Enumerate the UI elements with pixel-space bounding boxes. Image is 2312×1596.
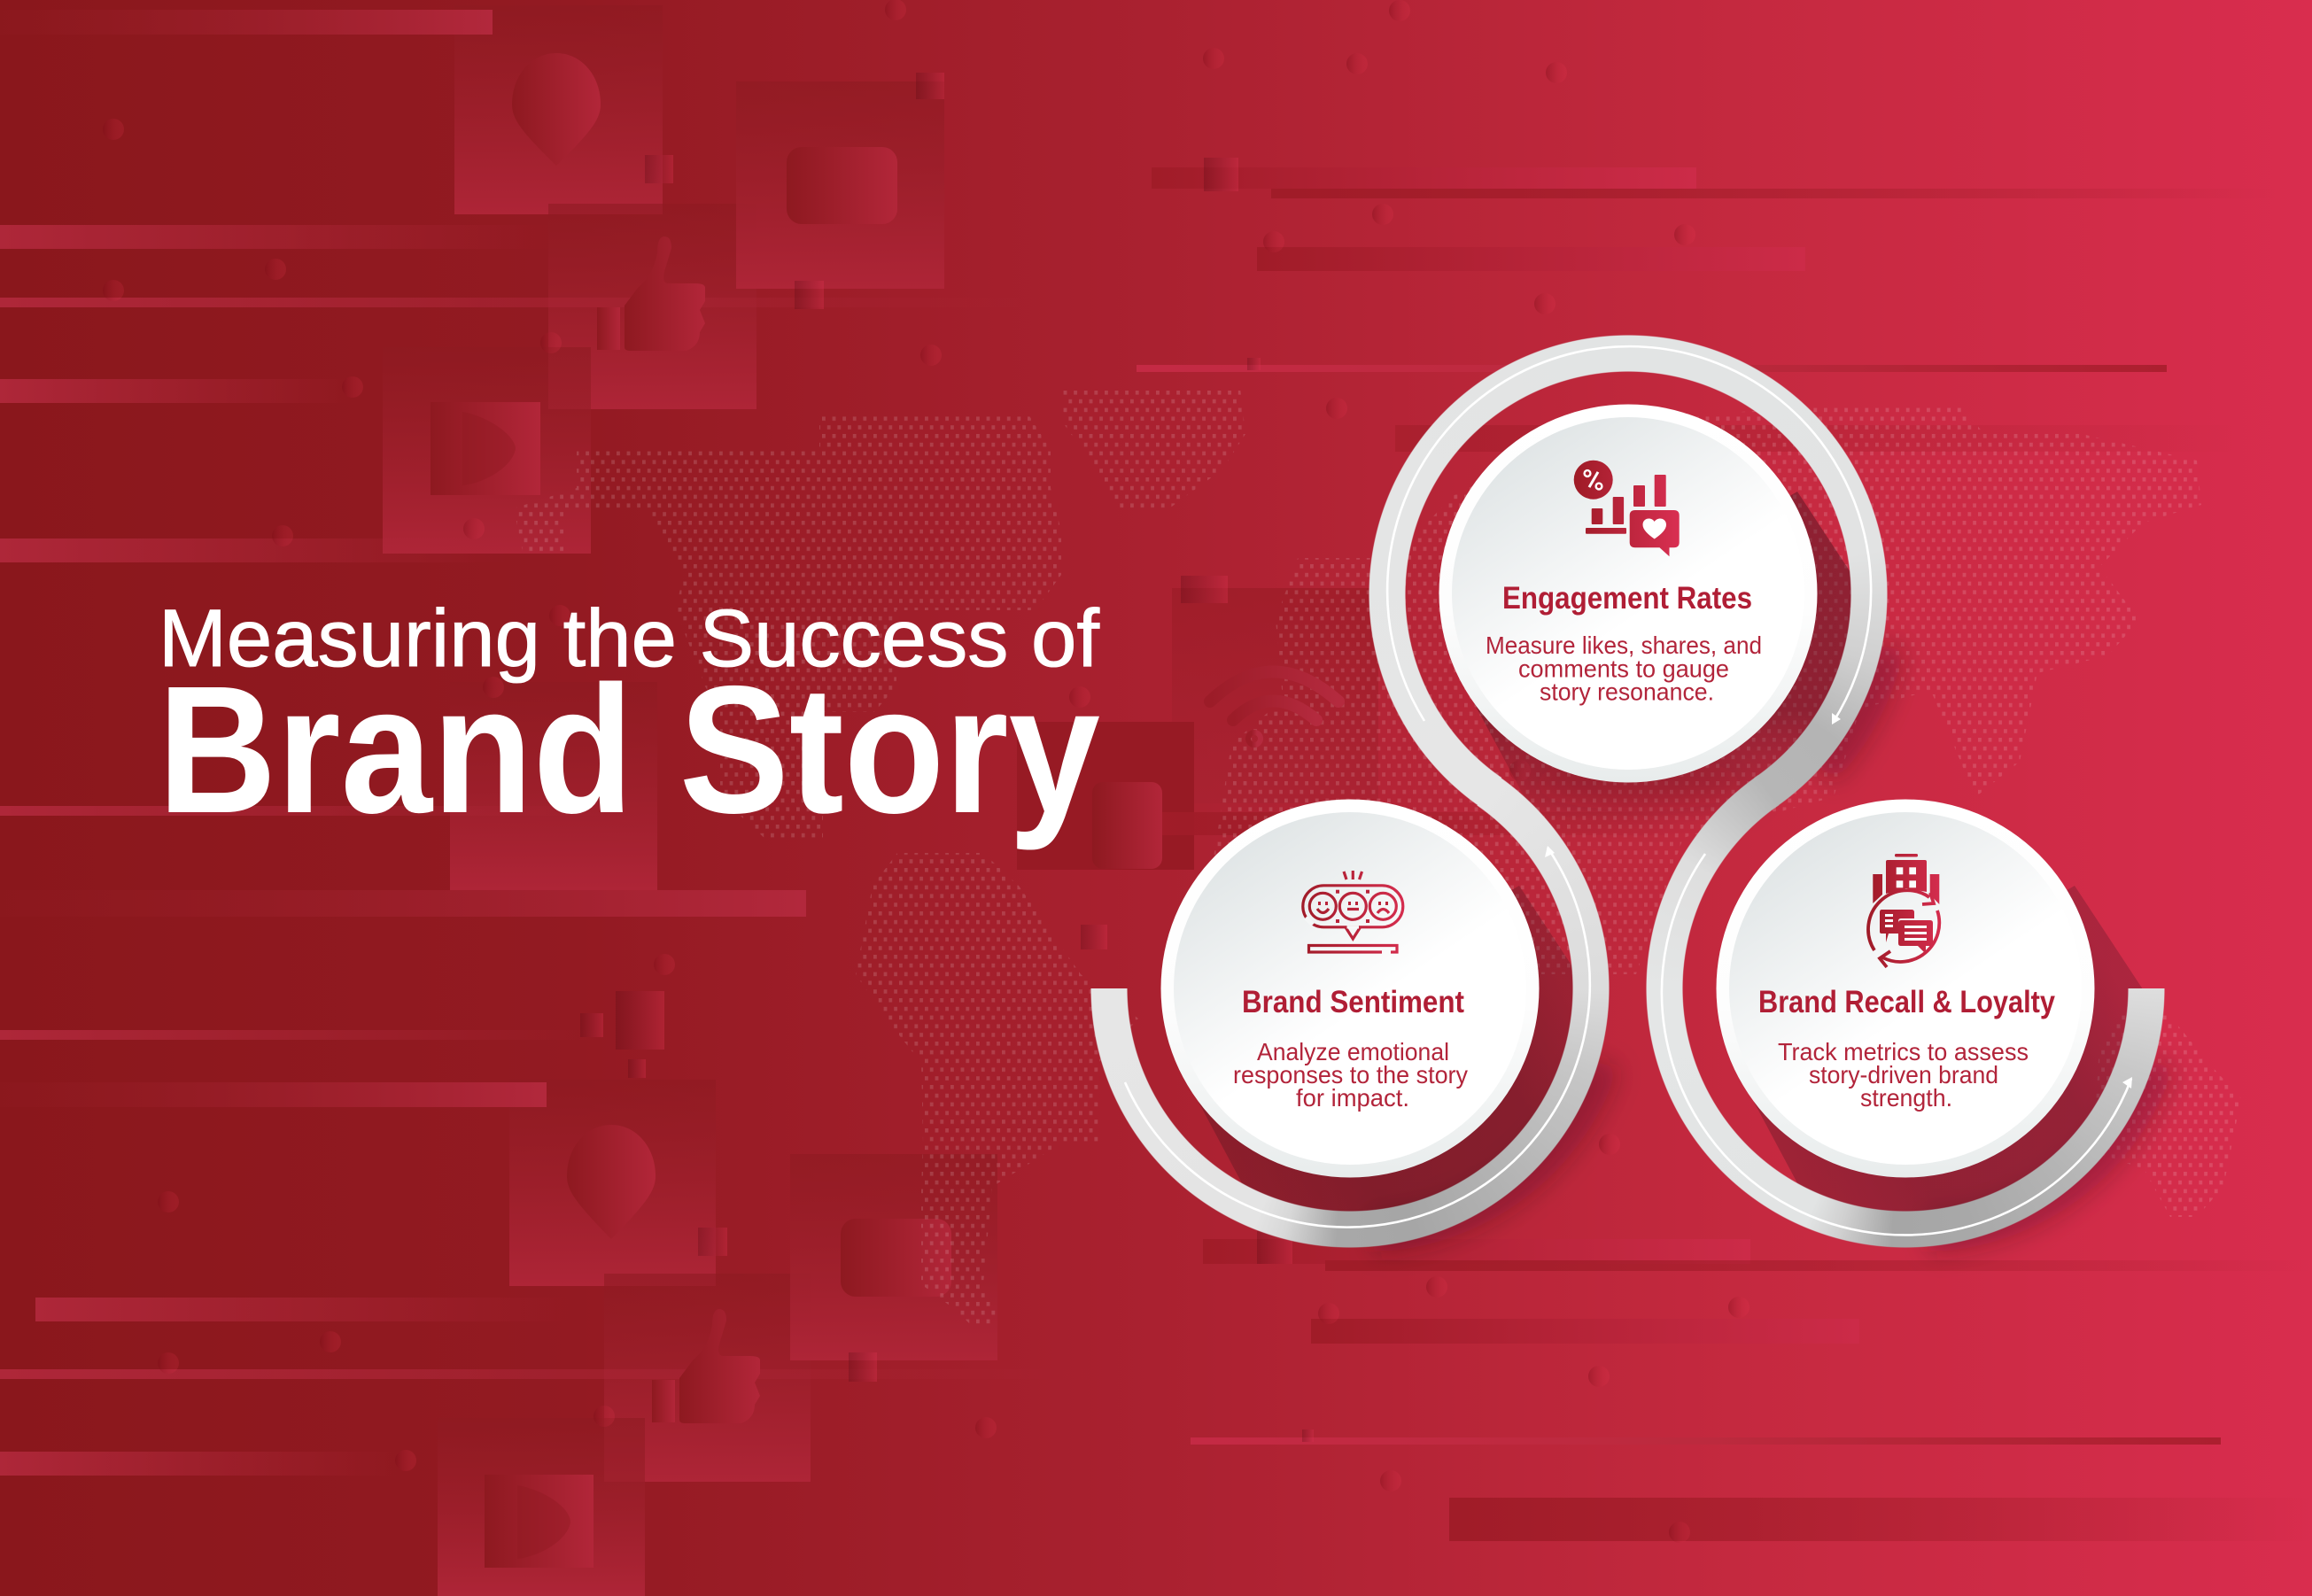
text: Brand Sentiment description: responses to the story	[1233, 1061, 1468, 1089]
arrow line: right circle	[1662, 854, 2132, 1235]
icon: building with circular arrows and chat bubbles	[1868, 854, 1939, 967]
decorative dots	[103, 0, 1750, 1543]
text: Brand Recall & Loyalty description: Track metrics to assess	[1778, 1038, 2029, 1065]
text: Engagement Rates description: story resonance.	[1540, 678, 1714, 705]
arrow line: left circle	[1125, 846, 1590, 1228]
panel: Brand Sentiment	[1160, 799, 1540, 1178]
heading: Brand Sentiment: Brand Sentiment	[1242, 985, 1464, 1019]
decorative icons: thumbs up	[597, 236, 760, 1423]
ribbon segment: left circle arc	[1090, 729, 1610, 1248]
text: Engagement Rates description: comments to gauge	[1518, 655, 1729, 682]
decorative small squares	[580, 73, 1314, 1442]
icon: engagement chart with percent and heart	[1574, 461, 1680, 556]
ribbon segment: top circle arc	[1369, 335, 1888, 854]
long shadows cast by the circles	[1186, 492, 2145, 1227]
S-shaped grey ribbon around the three circles	[1090, 335, 2165, 1248]
text: Brand Sentiment description: Analyze emotional	[1257, 1038, 1449, 1065]
arrow line: top circle	[1387, 346, 1871, 724]
text: Brand Recall & Loyalty description: story-driven brand	[1809, 1061, 1998, 1089]
icon: sentiment faces speech bubble	[1303, 871, 1403, 952]
text: Brand Sentiment description: for impact.	[1296, 1084, 1409, 1112]
decorative icons: location pins	[512, 53, 656, 1239]
ribbon segment: right circle arc	[1646, 729, 2165, 1248]
text: Engagement Rates description: Measure likes, shares, and	[1486, 631, 1762, 659]
decorative icon: wifi	[1210, 671, 1338, 741]
soft shadow below top circle	[1524, 757, 1754, 810]
title: Measuring the Success of	[159, 593, 1099, 684]
decorative icons: play tiles	[431, 402, 594, 1568]
decorative icons: rounded tiles	[787, 147, 1162, 1297]
text: Brand Recall & Loyalty description: strength.	[1860, 1084, 1952, 1112]
panel: Brand Recall & Loyalty	[1717, 799, 2094, 1178]
soft shadows outside the ribbon	[1373, 647, 2157, 1235]
world map dots	[514, 388, 2241, 1324]
title: Brand Story	[158, 648, 1100, 851]
heading: Engagement Rates: Engagement Rates	[1502, 581, 1752, 616]
panel: Engagement Rates	[1439, 404, 1818, 783]
heading: Brand Recall & Loyalty: Brand Recall & Loyalty	[1758, 985, 2055, 1019]
